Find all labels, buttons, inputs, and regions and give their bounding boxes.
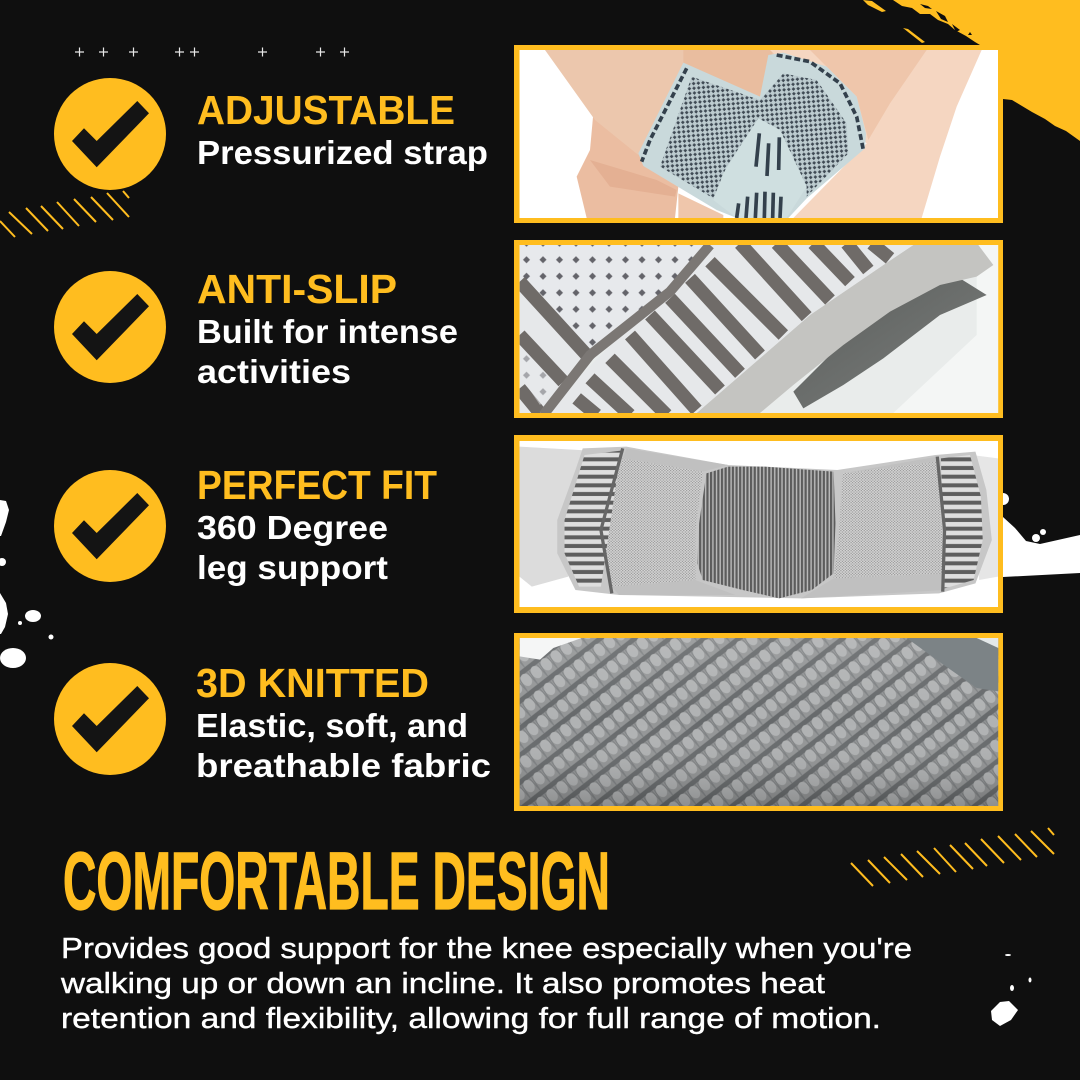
text: elastic soft breathable fabric: breathable fabric — [196, 747, 491, 784]
photo panel: elbow sleeve worn on arm — [514, 45, 1003, 223]
heading: adjustable: ADJUSTABLE — [197, 87, 455, 133]
icon: check badge — [54, 470, 166, 582]
text: 360 degree leg support: leg support — [197, 549, 388, 586]
white paint splash bottom right — [991, 954, 1032, 1026]
description paragraph: Provides good support for the knee especially when you're — [61, 933, 912, 965]
yellow hatch lines top left — [0, 191, 129, 237]
feature row: 3d knitted — [54, 660, 491, 784]
heading: perfect fit: PERFECT FIT — [197, 462, 437, 508]
text: built for intense activities: Built for intense — [197, 313, 458, 350]
decorative plus signs — [75, 48, 349, 56]
feature row: anti-slip — [54, 266, 458, 390]
icon: check badge — [54, 663, 166, 775]
feature row: adjustable — [54, 78, 488, 190]
yellow brush splash top right — [863, 0, 1080, 141]
text: elastic soft breathable fabric: Elastic, soft, and — [196, 707, 468, 744]
description paragraph: walking up or down an incline. It also promotes heat — [60, 968, 825, 1000]
heading: 3d knitted: 3D KNITTED — [196, 660, 429, 706]
text: built for intense activities: activities — [197, 353, 351, 390]
feature row: perfect fit — [54, 462, 437, 586]
photo panel: knit fabric close-up with stripes — [514, 240, 1003, 418]
photo panel: flat sleeve on tube — [514, 435, 1003, 613]
text: pressurized strap: Pressurized strap — [197, 134, 488, 171]
photo panel: 3d knit texture close-up — [514, 633, 1003, 811]
title: comfortable design: COMFORTABLE DESIGN — [63, 836, 610, 927]
heading: anti-slip: ANTI-SLIP — [197, 266, 397, 312]
icon: check badge — [54, 271, 166, 383]
yellow hatch lines bottom right — [851, 828, 1054, 886]
icon: check badge — [54, 78, 166, 190]
white paint splash right — [997, 493, 1080, 577]
text: 360 degree leg support: 360 Degree — [197, 509, 388, 546]
white paint splash left — [0, 500, 54, 668]
description paragraph: retention and flexibility, allowing for full range of motion. — [61, 1003, 881, 1035]
